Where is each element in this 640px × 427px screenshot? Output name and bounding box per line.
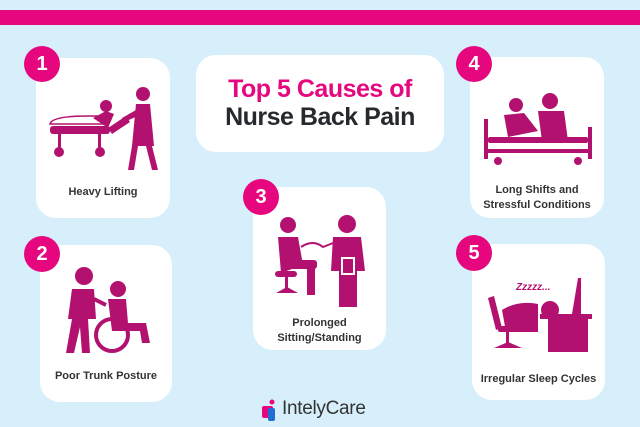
badge 3: 3	[255, 186, 267, 208]
icon: stretcher	[49, 87, 158, 170]
label: Stressful Conditions	[483, 199, 591, 211]
panel: heavy lifting	[36, 58, 170, 218]
badge 4: 4	[468, 53, 480, 75]
icon: sleeping at desk	[488, 278, 592, 352]
label	[483, 184, 591, 211]
title	[225, 75, 415, 131]
label: Irregular Sleep Cycles	[481, 373, 596, 385]
label: Prolonged	[292, 317, 347, 329]
panel: irregular sleep	[472, 244, 605, 400]
badge 4	[456, 46, 492, 82]
panel: long shifts	[470, 57, 604, 218]
badge 5: 5	[468, 242, 480, 264]
logo	[262, 398, 366, 421]
badge 2: 2	[36, 243, 48, 265]
icon: wheelchair	[66, 267, 150, 353]
badge 2	[24, 236, 60, 272]
icon: sleeping at desk: Zzzzz...	[515, 282, 550, 293]
label: Long Shifts and	[495, 184, 579, 196]
badge 5	[456, 235, 492, 271]
panel: poor trunk posture	[40, 245, 172, 402]
badge 3	[243, 179, 279, 215]
icon: doctor and patient	[275, 215, 365, 307]
badge 1	[24, 46, 60, 82]
title card	[196, 55, 444, 152]
title: Top 5 Causes of	[228, 75, 412, 103]
panel: prolonged sitting	[253, 187, 386, 350]
icon: hospital bed	[484, 93, 592, 165]
badge 1: 1	[36, 53, 48, 75]
label: Heavy Lifting	[68, 186, 138, 198]
title: Nurse Back Pain	[225, 103, 415, 131]
logo text: IntelyCare	[282, 398, 366, 419]
label: Sitting/Standing	[277, 332, 362, 344]
label	[277, 317, 362, 344]
label: Poor Trunk Posture	[55, 370, 157, 382]
icon: logo mark	[262, 400, 275, 421]
